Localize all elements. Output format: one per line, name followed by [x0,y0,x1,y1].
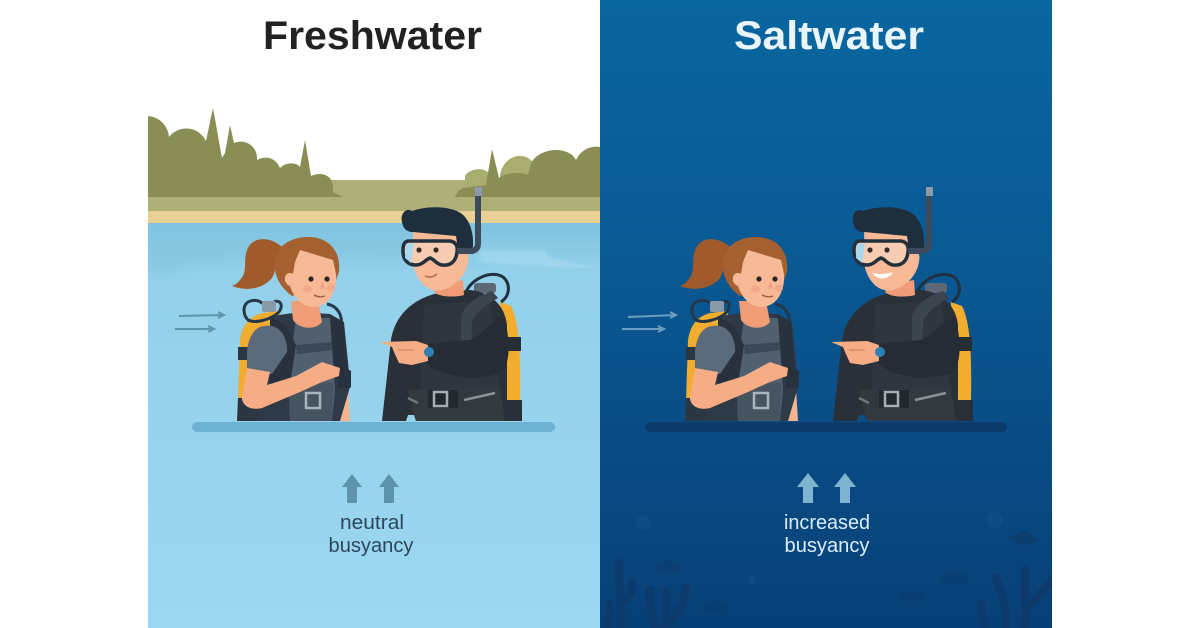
platform bar [192,422,555,432]
platform bar [645,422,1007,432]
arrows: buoyancy [342,474,399,503]
label: neutral busyancy: busyancy [328,535,414,557]
figure: female diver [680,237,799,421]
figure: male diver [831,187,973,421]
arrows: current [622,312,676,332]
label: increased busyancy: increased [784,512,870,534]
landscape: far bank and trees [148,108,600,223]
arrows: buoyancy [797,473,856,503]
panel: saltwater [600,0,1056,628]
label: neutral busyancy: neutral [340,512,404,534]
label: increased busyancy: busyancy [784,535,870,557]
heading: Freshwater: Freshwater [263,14,482,58]
figure: female diver [232,237,351,421]
seabed silhouettes: coral and fish [603,530,1052,628]
label: increased busyancy [784,512,870,557]
heading: Saltwater: Saltwater [734,14,924,58]
arrows: current [175,312,224,332]
label: neutral busyancy [328,512,414,557]
figure: male diver [380,187,522,421]
panel: freshwater [148,0,600,628]
water [148,223,600,628]
